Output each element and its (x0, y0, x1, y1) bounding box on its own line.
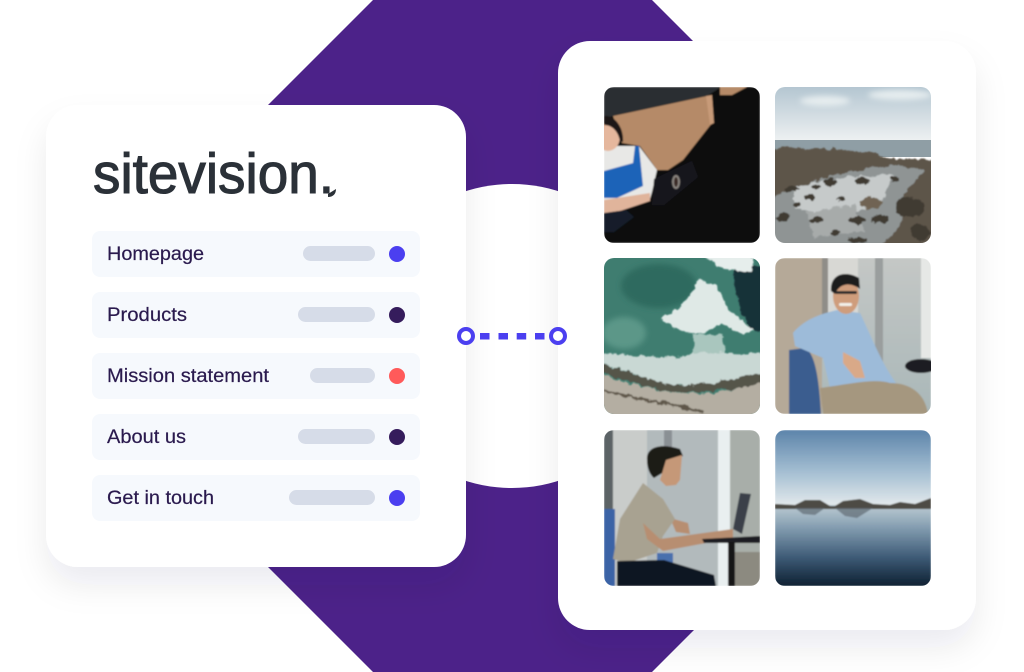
menu row: About us: About us (107, 427, 186, 448)
photo: woman at laptop (596, 87, 760, 243)
photo: calm lake (775, 430, 931, 586)
photo: smiling man on chair (775, 258, 937, 414)
menu row: Mission statement (92, 353, 420, 399)
menu row: About us (92, 414, 420, 460)
menu row: Mission statement: Mission statement (107, 366, 270, 387)
logo: sitevision: sitevision. (93, 142, 334, 206)
purple octagon background (150, 0, 800, 672)
connector: dashed link between card and gallery (459, 329, 565, 343)
menu row: Products: Products (107, 305, 187, 326)
menu row: Get in touch: Get in touch (107, 488, 214, 509)
menu row: Products (92, 292, 420, 338)
photo: aerial coast (604, 258, 760, 414)
menu row: Homepage (92, 231, 420, 277)
panel: photo gallery card (558, 41, 976, 630)
menu row: Homepage: Homepage (107, 244, 204, 265)
photo: rocky shore (775, 87, 931, 243)
white central circle (360, 184, 664, 488)
panel: site navigation card (46, 105, 466, 567)
menu row: Get in touch (92, 475, 420, 521)
photo: man working at laptop (604, 430, 760, 586)
